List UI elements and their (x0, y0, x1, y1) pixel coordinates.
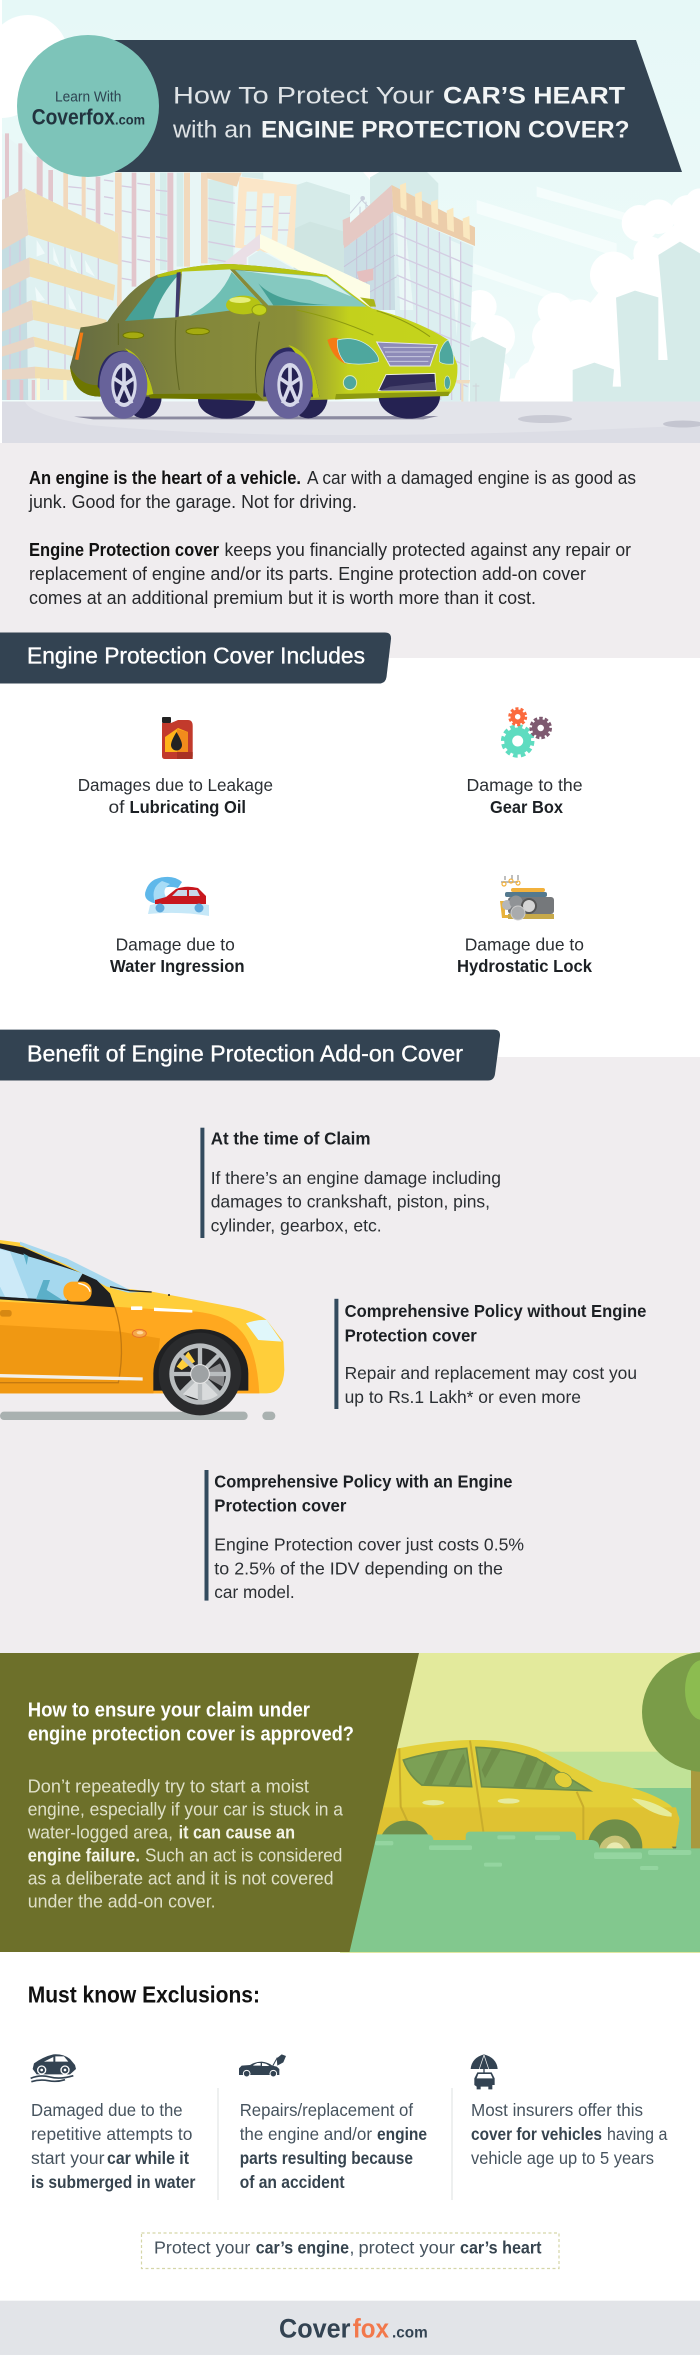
hero green car (70, 264, 457, 419)
item: hydrostatic lock: Damage due to (465, 935, 584, 955)
logo circle: .com (115, 111, 145, 127)
callout: policy without engine protection: Repair and replacement may cost you (345, 1363, 637, 1383)
callout: policy with engine protection: Engine Protection cover just costs 0.5% (214, 1534, 524, 1554)
exclusion: submerged: Damaged due to the (31, 2100, 183, 2120)
panel: claim advice: it can cause an (179, 1822, 295, 1842)
callout: policy with engine protection: Comprehensive Policy with an Engine (214, 1471, 513, 1491)
panel: claim advice: as a deliberate act and it is not covered (28, 1868, 333, 1888)
callout: policy without engine protection: Comprehensive Policy without Engine (345, 1301, 647, 1321)
item: hydrostatic lock: Hydrostatic Lock (457, 956, 592, 976)
section heading: includes (0, 632, 391, 684)
banner title line 1: How To Protect Your (173, 82, 434, 109)
section heading: benefit: Benefit of Engine Protection Add-on Cover (27, 1040, 463, 1066)
callout: policy with engine protection (204, 1470, 524, 1602)
callout: tagline box (142, 2233, 559, 2268)
callout: policy with engine protection: car model. (214, 1582, 295, 1602)
exclusion: submerged: car while it (107, 2148, 189, 2168)
callout: tagline box: Protect your (154, 2237, 251, 2257)
intro text: replacement of engine and/or its parts. Engine protection add-on cover (29, 564, 586, 584)
exclusion: submerged: start your (31, 2148, 105, 2168)
panel: claim advice (0, 1653, 419, 1952)
callout: tagline box: , (350, 2237, 354, 2257)
panel: claim advice: engine failure. (28, 1845, 140, 1865)
item: hydrostatic lock (457, 875, 592, 976)
logo circle: Learn With (55, 89, 121, 106)
callout: at the time of claim: At the time of Claim (211, 1128, 370, 1148)
icon: car in water (31, 2054, 76, 2082)
road (0, 402, 700, 443)
exclusion: submerged (31, 2054, 196, 2192)
icon: gears (503, 709, 550, 756)
banner title line 2: with an (172, 117, 252, 144)
intro text: Engine Protection cover (29, 540, 219, 560)
item: lubricating oil: of (108, 797, 125, 817)
exclusion: vehicle age: vehicle age up to 5 years (471, 2148, 654, 2168)
item: water ingression (110, 877, 245, 976)
exclusion: accident: engine (377, 2124, 427, 2144)
callout: at the time of claim: cylinder, gearbox, etc. (211, 1216, 382, 1236)
panel: claim advice: under the add-on cover. (28, 1891, 216, 1911)
callout: policy without engine protection: Protection cover (345, 1325, 477, 1345)
icon: oil can (162, 717, 193, 759)
hero illustration (0, 0, 700, 443)
footer logo: .com (392, 2324, 428, 2341)
panel: claim advice: water-logged area, (27, 1822, 173, 1842)
tree (642, 1652, 700, 1850)
front-left beige building and pale block (2, 188, 370, 400)
centre-right glass tower (344, 183, 479, 402)
callout: policy with engine protection: Protection cover (214, 1495, 347, 1515)
hero car wheels (99, 351, 313, 419)
exclusion: vehicle age: Most insurers offer this (471, 2100, 643, 2120)
banner title line 1 (173, 82, 625, 109)
item: water ingression: Water Ingression (110, 956, 245, 976)
callout: tagline box: car’s heart (460, 2237, 542, 2257)
exclusion: vehicle age: cover for vehicles (471, 2124, 602, 2144)
callout: policy without engine protection (334, 1299, 647, 1409)
yellow car (0, 1240, 284, 1420)
city silhouettes right (370, 172, 700, 403)
footer logo: fox (353, 2313, 389, 2343)
flooded car (370, 1740, 679, 1874)
intro text (28, 468, 636, 608)
intro text: junk. Good for the garage. Not for driving. (28, 492, 357, 512)
callout: policy without engine protection: up to Rs.1 Lakh* or even more (345, 1387, 581, 1407)
hero car front lights and grille (327, 338, 454, 391)
exclusion: accident: the engine and/or (240, 2124, 372, 2144)
intro text: A car with a damaged engine is as good as (307, 468, 636, 488)
item: lubricating oil: Damages due to Leakage (78, 775, 273, 795)
logo circle: Coverfox (32, 104, 116, 129)
icon: car with open hood (239, 2054, 286, 2077)
yellow car wheel (159, 1333, 241, 1415)
heading: exclusions: Must know Exclusions: (28, 1982, 260, 2008)
car windows (125, 269, 367, 321)
item: gear box (466, 709, 583, 817)
exclusion: submerged: repetitive attempts to (31, 2124, 192, 2144)
section heading: benefit (0, 1030, 500, 1080)
intro text: keeps you financially protected against any repair or (224, 540, 631, 560)
striped background building (2, 133, 350, 400)
intro panel background (0, 443, 700, 658)
intro text: An engine is the heart of a vehicle. (29, 468, 301, 488)
logo circle (17, 35, 159, 177)
section heading: includes: Engine Protection Cover Includes (27, 642, 365, 668)
banner title line 1: CAR’S HEART (443, 82, 625, 109)
exclusion: accident (239, 2054, 427, 2192)
exclusion: vehicle age: having a (607, 2124, 668, 2144)
panel: claim advice: engine, especially if your car is stuck in a (28, 1799, 344, 1819)
callout: tagline box: protect your (358, 2237, 455, 2257)
callout: at the time of claim: If there’s an engine damage including (211, 1168, 501, 1188)
flood illustration (337, 1652, 700, 1953)
footer logo: Cover (279, 2313, 351, 2343)
cloud top left (0, 15, 68, 118)
item: lubricating oil: Lubricating Oil (130, 797, 246, 817)
item: gear box: Damage to the (466, 775, 583, 795)
intro text: comes at an additional premium but it is worth more than it cost. (29, 588, 536, 608)
divider (217, 2088, 219, 2200)
flood water (337, 1832, 700, 1952)
item: lubricating oil (78, 717, 273, 817)
panel: claim advice: Don’t repeatedly try to start a moist (28, 1776, 309, 1796)
panel: claim advice: Such an act is considered (145, 1845, 342, 1865)
exclusion: submerged: is submerged in water (31, 2172, 196, 2192)
banner title line 2: ENGINE PROTECTION COVER? (261, 117, 630, 144)
divider (451, 2088, 453, 2200)
icon: car in wave (145, 877, 209, 916)
callout: policy with engine protection: to 2.5% of the IDV depending on the (214, 1558, 503, 1578)
exclusion: accident: of an accident (240, 2172, 345, 2192)
sky streaks and clouds right (317, 157, 700, 408)
callout: tagline box: car’s engine (256, 2237, 349, 2257)
benefit panel background (0, 1057, 700, 1653)
title banner (90, 40, 682, 172)
exclusion: accident: parts resulting because (240, 2148, 413, 2168)
footer logo (0, 2301, 700, 2355)
panel: claim advice: How to ensure your claim under (28, 1699, 310, 1722)
icon: engine (500, 875, 554, 920)
exclusion: accident: Repairs/replacement of (240, 2100, 413, 2120)
callout: at the time of claim: damages to crankshaft, piston, pins, (211, 1192, 490, 1212)
item: gear box: Gear Box (490, 797, 563, 817)
wheel arches (98, 351, 153, 397)
item: water ingression: Damage due to (116, 935, 235, 955)
callout: at the time of claim (200, 1128, 501, 1238)
panel: claim advice: engine protection cover is approved? (28, 1723, 354, 1746)
icon: umbrella over car (471, 2054, 498, 2089)
exclusion: vehicle age (471, 2054, 668, 2168)
